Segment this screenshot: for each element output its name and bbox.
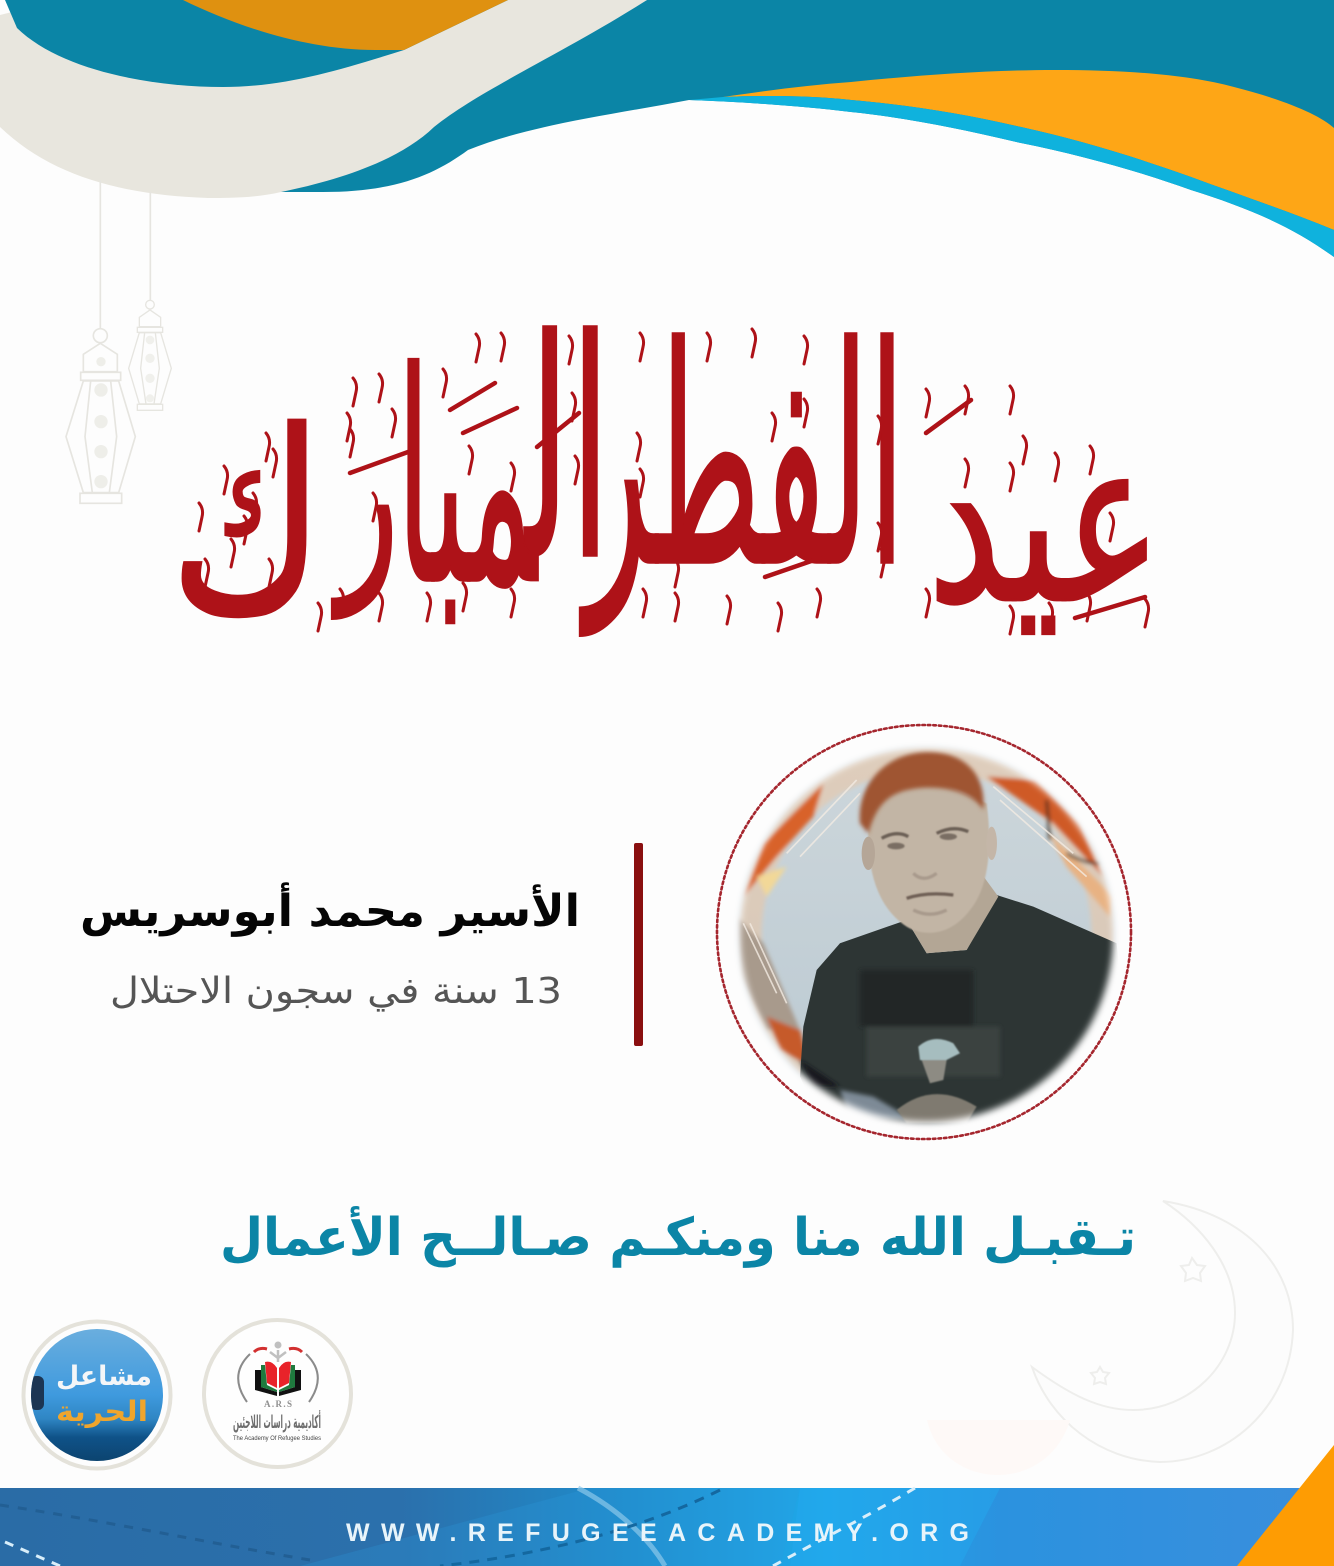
years in prison subtitle: 13 سنة في سجون الاحتلال — [110, 971, 562, 1012]
logo: Mashael Al-Hurriya: الحرية — [56, 1395, 148, 1428]
A.R.S initials: A.R.S — [264, 1399, 292, 1409]
hair — [860, 752, 984, 833]
website url: WWW.REFUGEEACADEMY.ORG — [346, 1519, 969, 1547]
ornamental fatha slashes — [350, 383, 1145, 618]
prisoner portrait — [716, 724, 1132, 1140]
t-shirt — [800, 895, 1120, 1150]
large lantern — [66, 329, 135, 503]
small lantern — [129, 300, 171, 410]
dark dashed trail — [440, 1490, 720, 1566]
rim brush streaks — [743, 780, 1087, 1003]
orange corner triangle — [1237, 1445, 1334, 1566]
faint crescent and stars — [927, 1201, 1293, 1475]
photo illustration — [736, 746, 1118, 1127]
prisoner name: الأسير محمد أبوسريس — [80, 882, 580, 937]
orange wave — [723, 70, 1334, 230]
shirt print figure — [897, 1039, 977, 1123]
dark orange wave — [183, 0, 508, 50]
word: al-fitr: الفطر — [579, 283, 905, 636]
word: eid: عيد — [927, 386, 1163, 654]
footer band — [0, 1445, 1334, 1566]
faint pink half circle — [927, 1420, 1070, 1475]
logo: Academy of Refugee Studies: أكاديمية دراسات اللاجئين — [233, 1410, 321, 1433]
face — [868, 780, 989, 933]
word: al (of al-mubarak): ال‍ — [524, 276, 610, 626]
open book emblem — [238, 1342, 318, 1402]
main calligraphy title — [170, 276, 1162, 669]
vertical divider bar — [634, 843, 643, 1046]
lantern decorations — [66, 180, 171, 503]
dotted ring — [717, 725, 1131, 1139]
logo: Academy of Refugee Studies — [204, 1320, 351, 1467]
word: r: ر — [331, 362, 399, 619]
logo: Mashael Al-Hurriya — [24, 1322, 170, 1468]
logo text: مشاعل — [56, 1361, 152, 1392]
top wave banner — [0, 0, 1334, 257]
neck — [912, 878, 998, 954]
ornamental tashkeel flecks — [199, 329, 1149, 634]
inner teal wave — [5, 0, 508, 87]
closing greeting line: تـقبـل الله منا ومنكـم صـالــح الأعمال — [220, 1205, 1136, 1268]
white dashed trail — [773, 1488, 915, 1566]
pale curved streak — [578, 1488, 665, 1566]
word: mba: ‍مبا — [397, 313, 538, 650]
beige ribbon — [0, 0, 647, 198]
english academy name: The Academy Of Refugee Studies — [233, 1436, 321, 1442]
word: k: ك — [170, 378, 324, 669]
cyan wave — [689, 96, 1334, 257]
eyes and brows — [882, 829, 968, 914]
